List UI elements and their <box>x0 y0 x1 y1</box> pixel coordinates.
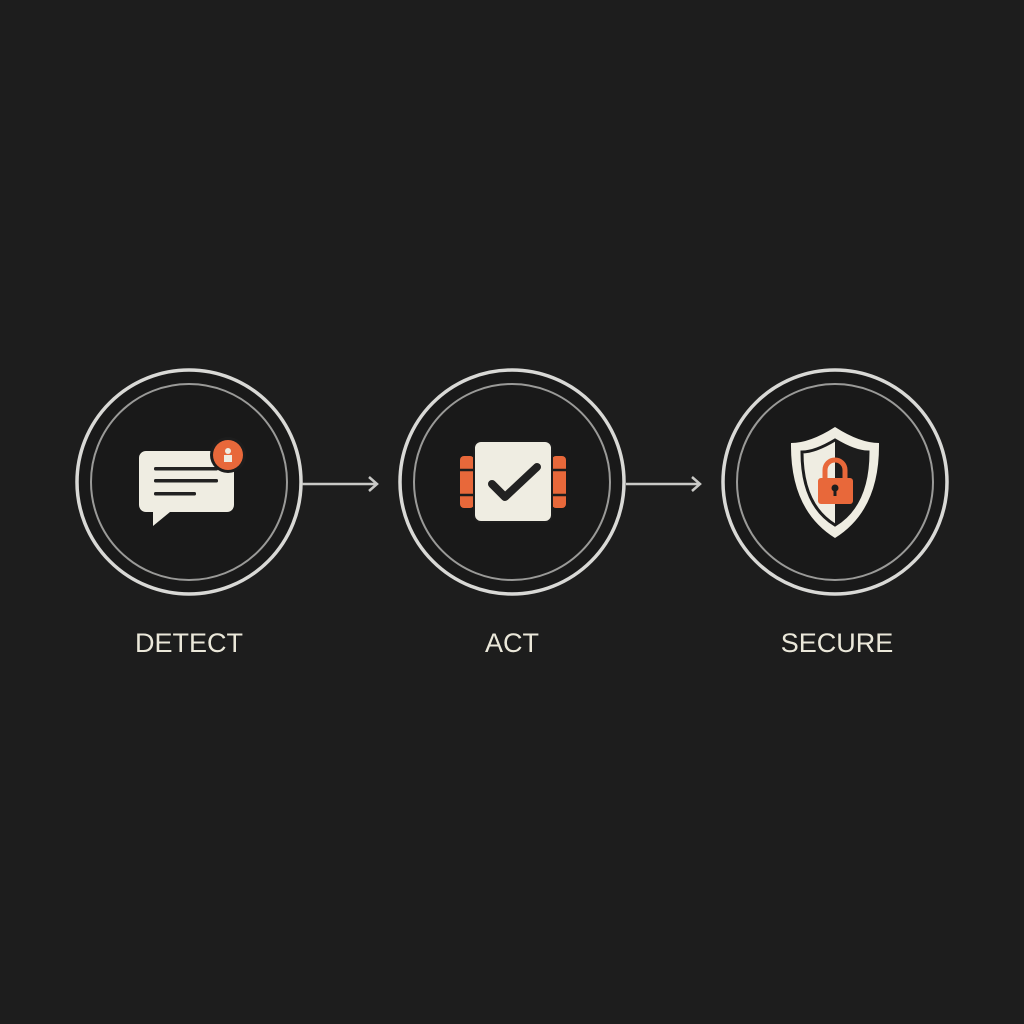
label: detect: DETECT <box>135 628 243 658</box>
arrow 1 <box>302 477 377 491</box>
icon: chat bubble with alert <box>139 437 246 526</box>
arrow 2 <box>626 477 700 491</box>
label: secure: SECURE <box>781 628 893 658</box>
label: act: ACT <box>485 628 539 658</box>
icon: shield with lock <box>791 427 879 538</box>
step circle: detect <box>77 370 301 594</box>
step circle: secure <box>723 370 947 594</box>
step circle: act <box>400 370 624 594</box>
icon: checkbox <box>460 441 566 522</box>
